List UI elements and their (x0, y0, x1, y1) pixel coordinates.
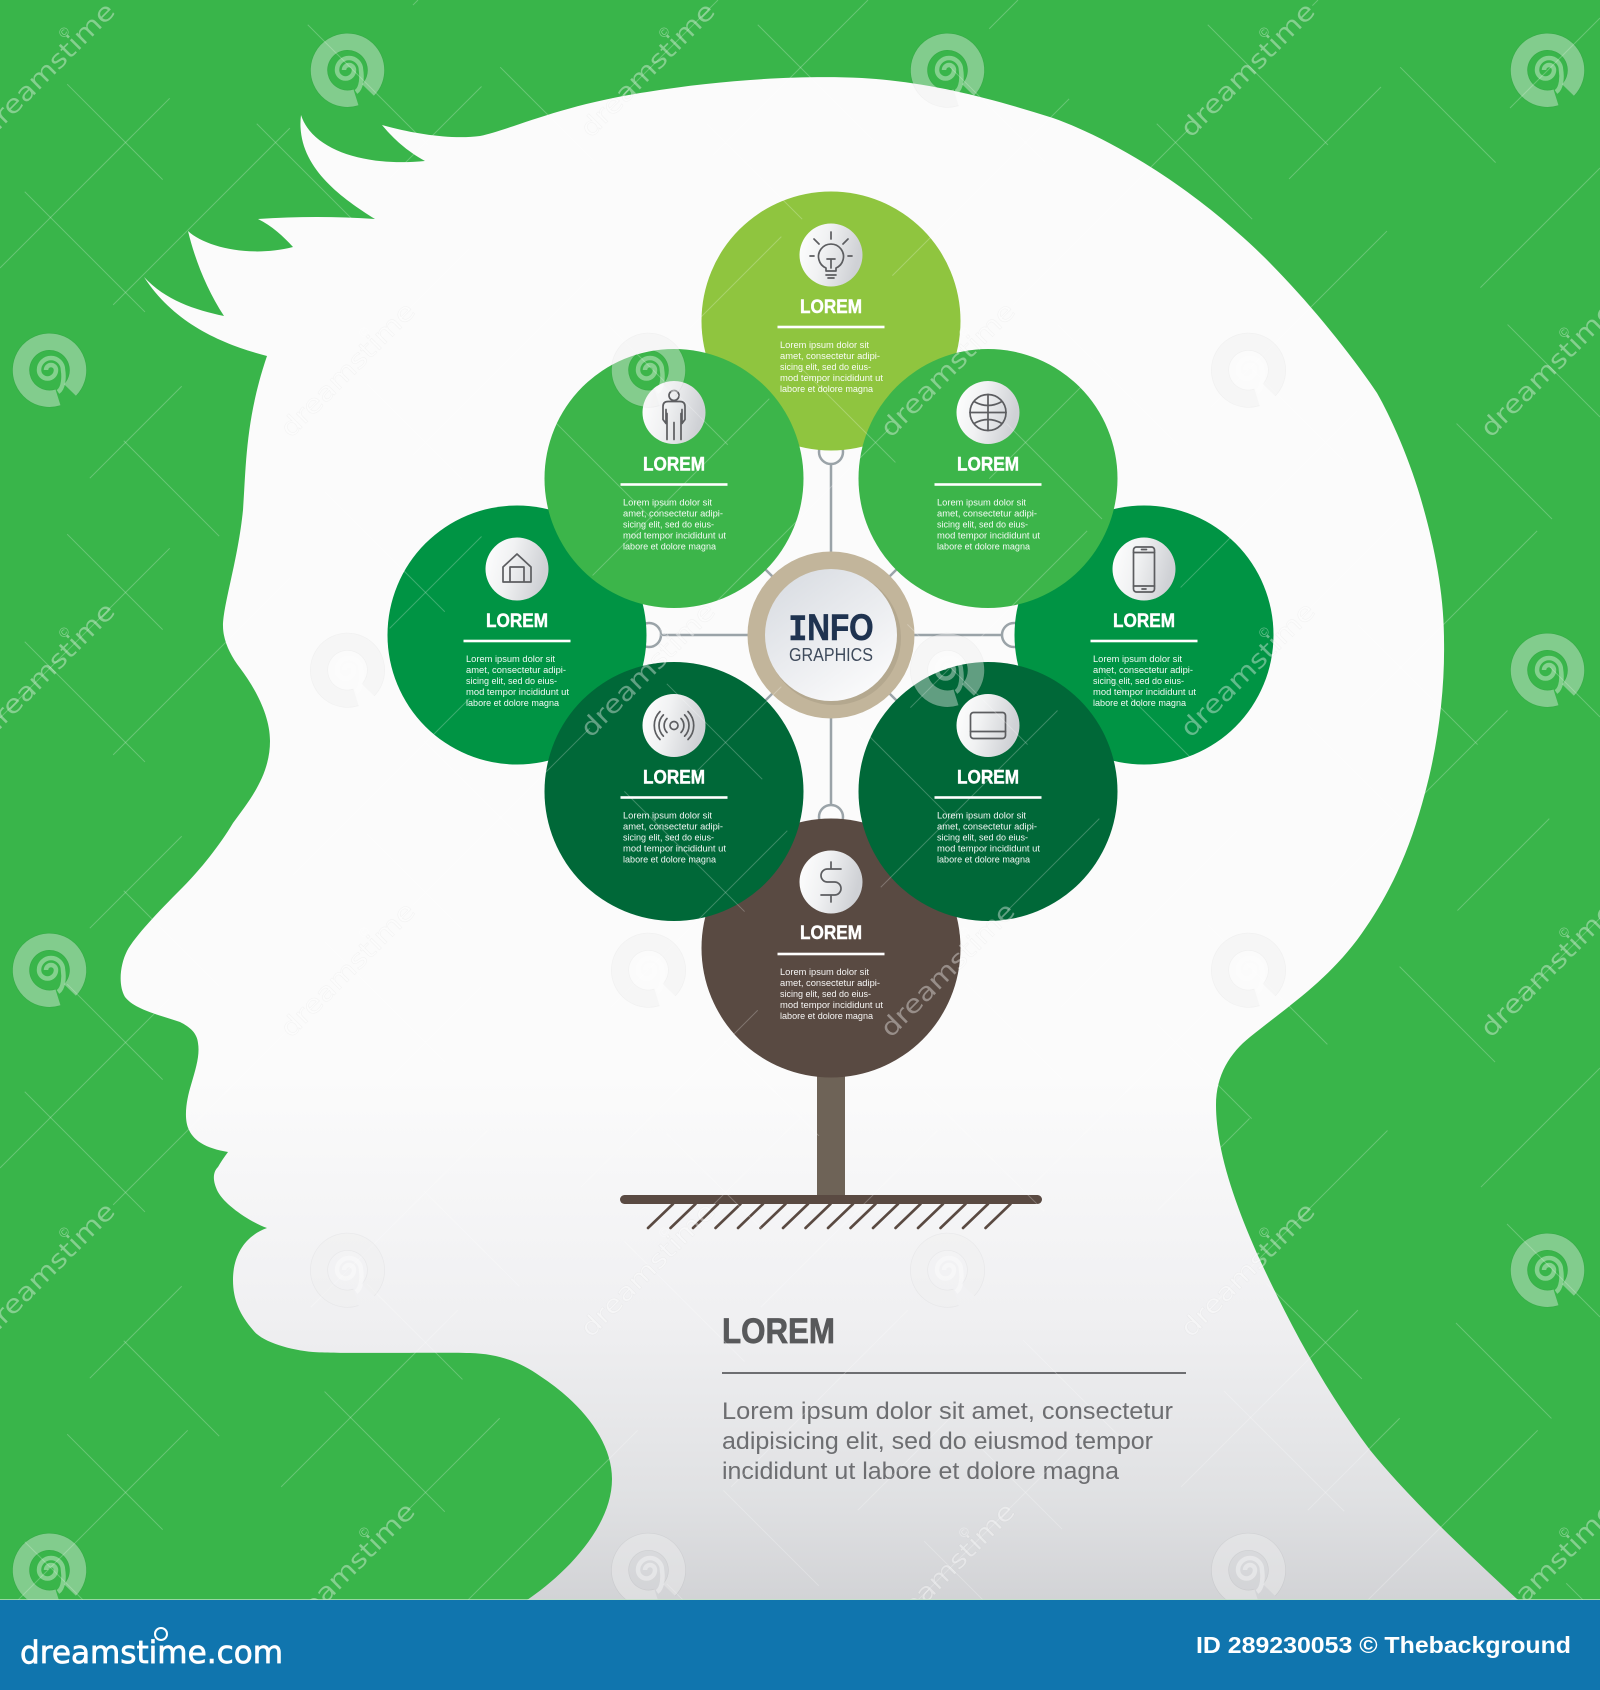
bottom paragraph (722, 1398, 1173, 1485)
heading: LOREM (957, 454, 1019, 476)
bottom heading: LOREM (722, 1312, 835, 1351)
body text: amet, consectetur adipi- (623, 508, 723, 520)
watermark: diagonal wordmarks: © (955, 323, 973, 341)
body text (937, 498, 1040, 552)
icon: dollar (821, 862, 841, 902)
body text: sicing elit, sed do eius- (780, 989, 871, 1000)
body text: amet, consectetur adipi- (623, 822, 723, 832)
body text: sicing elit, sed do eius- (937, 832, 1028, 844)
body text (623, 810, 726, 866)
watermark: diagonal wordmarks: © (55, 623, 73, 641)
tree trunk (817, 1070, 845, 1197)
bottom paragraph: adipisicing elit, sed do eiusmod tempor (722, 1428, 1153, 1455)
watermark: diagonal wordmarks: © (1555, 323, 1573, 341)
body text: mod tempor incididunt ut (937, 844, 1040, 854)
footer band (0, 1599, 1600, 1690)
icon: tablet (970, 712, 1006, 738)
watermark: diagonal wordmarks: © (355, 323, 373, 341)
body text: Lorem ipsum dolor sit (466, 654, 555, 665)
body text: amet, consectetur adipi- (780, 351, 880, 362)
icon: house (503, 554, 531, 582)
watermark: diagonal wordmarks: dreamstime (874, 1496, 1021, 1643)
heading: LOREM (957, 766, 1019, 788)
head silhouette (121, 77, 1518, 1600)
body text (937, 810, 1040, 866)
body text: sicing elit, sed do eius- (937, 520, 1028, 530)
body text: Lorem ipsum dolor sit (780, 967, 869, 978)
watermark: diagonal wordmarks: © (1555, 923, 1573, 941)
body text: labore et dolore magna (1093, 698, 1187, 709)
watermark: diagonal wordmarks: © (355, 1523, 373, 1541)
body text: mod tempor incididunt ut (623, 530, 726, 542)
panel: top circle, light bulb (702, 192, 960, 450)
body text: sicing elit, sed do eius- (780, 362, 871, 373)
watermark: diagonal wordmarks: dreamstime (1174, 1196, 1321, 1343)
watermark: diagonal wordmarks: dreamstime (874, 296, 1021, 443)
body text: amet, consectetur adipi- (780, 978, 880, 989)
watermark: diagonal wordmarks: © (655, 623, 673, 641)
body text: sicing elit, sed do eius- (623, 520, 714, 530)
bottom paragraph: incididunt ut labore et dolore magna (722, 1458, 1120, 1485)
icon: light bulb (810, 232, 852, 278)
panel: upper-right circle, basketball (858, 349, 1118, 608)
connectors from hub to circles (637, 440, 1026, 829)
icon: basketball (970, 394, 1006, 430)
watermark: diagonal wordmarks: dreamstime (1474, 296, 1600, 443)
footer credit: ID 289230053 © Thebackground (1196, 1632, 1571, 1658)
watermark: diagonal wordmarks: dreamstime (574, 0, 721, 143)
watermark: diagonal wordmarks: © (955, 923, 973, 941)
watermark: diagonal wordmarks: dreamstime (874, 896, 1021, 1043)
watermark: diagonal wordmarks: © (655, 23, 673, 41)
heading: LOREM (1113, 610, 1175, 632)
body text: labore et dolore magna (937, 854, 1031, 866)
watermark: diagonal wordmarks: © (1255, 23, 1273, 41)
body text: amet, consectetur adipi- (937, 822, 1037, 832)
body text: Lorem ipsum dolor sit (937, 810, 1026, 822)
hub title INFO: INFO (788, 608, 874, 652)
body text: labore et dolore magna (780, 384, 874, 395)
body text: amet, consectetur adipi- (1093, 665, 1193, 676)
watermark: diagonal wordmarks: © (55, 23, 73, 41)
body text: Lorem ipsum dolor sit (623, 498, 712, 508)
body text: sicing elit, sed do eius- (623, 832, 714, 844)
icon: phone (1134, 547, 1154, 592)
panel: left circle, house (388, 506, 646, 764)
ground line with hatching (620, 1195, 1042, 1228)
hub subtitle GRAPHICS: GRAPHICS (789, 644, 873, 665)
bottom paragraph: Lorem ipsum dolor sit amet, consectetur (722, 1398, 1173, 1425)
panel: lower-right circle, tablet (858, 662, 1118, 921)
heading: LOREM (486, 610, 548, 632)
body text (466, 654, 569, 709)
body text: mod tempor incididunt ut (780, 1000, 883, 1011)
body text: mod tempor incididunt ut (1093, 687, 1196, 698)
watermark: diagonal wordmarks: dreamstime (574, 596, 721, 743)
body text: sicing elit, sed do eius- (466, 676, 557, 687)
icon: person (663, 390, 685, 440)
body text (1093, 654, 1196, 709)
watermark: diagonal wordmarks: © (655, 1223, 673, 1241)
body text: mod tempor incididunt ut (937, 530, 1040, 542)
body text: Lorem ipsum dolor sit (623, 810, 712, 822)
body text: labore et dolore magna (623, 854, 717, 866)
body text: labore et dolore magna (466, 698, 560, 709)
panel: bottom circle, dollar (702, 818, 960, 1078)
watermark: diagonal wordmarks: © (1555, 1523, 1573, 1541)
heading: LOREM (643, 454, 705, 476)
watermark: diagonal wordmarks: dreamstime (1174, 596, 1321, 743)
body text: amet, consectetur adipi- (937, 508, 1037, 520)
heading: LOREM (800, 922, 862, 944)
hub: infographics centre (748, 552, 914, 718)
watermark: diagonal wordmarks: dreamstime (574, 1196, 721, 1343)
watermark: diagonal wordmarks: dreamstime (1174, 0, 1321, 143)
body text: labore et dolore magna (937, 542, 1031, 552)
icon: wireless signal (654, 712, 694, 740)
watermark: diagonal wordmarks: dreamstime (1474, 1496, 1600, 1643)
body text: labore et dolore magna (623, 542, 717, 552)
heading: LOREM (643, 766, 705, 788)
body text: sicing elit, sed do eius- (1093, 676, 1184, 687)
bottom text block (722, 1312, 1186, 1485)
watermark: diagonal wordmarks: © (355, 923, 373, 941)
watermark: diagonal wordmarks: © (955, 1523, 973, 1541)
watermark: diagonal wordmarks: © (1255, 623, 1273, 641)
body text: amet, consectetur adipi- (466, 665, 566, 676)
body text (623, 498, 726, 552)
footer logo: dreamstime.com (20, 1635, 283, 1671)
watermark: diagonal wordmarks: dreamstime (274, 1496, 421, 1643)
body text: Lorem ipsum dolor sit (937, 498, 1026, 508)
body text: mod tempor incididunt ut (623, 844, 726, 854)
body text: mod tempor incididunt ut (466, 687, 569, 698)
heading: LOREM (800, 296, 862, 318)
body text: labore et dolore magna (780, 1011, 874, 1022)
body text: Lorem ipsum dolor sit (1093, 654, 1182, 665)
watermark: diagonal wordmarks: dreamstime (274, 296, 421, 443)
body text: mod tempor incididunt ut (780, 373, 883, 384)
panel: upper-left circle, person (544, 349, 804, 608)
watermark: diagonal wordmarks: dreamstime (274, 896, 421, 1043)
watermark: diagonal wordmarks: © (1255, 1223, 1273, 1241)
panel: lower-left circle, signal (544, 662, 804, 921)
watermark: diagonal wordmarks: dreamstime (1474, 896, 1600, 1043)
watermark: diagonal wordmarks: © (55, 1223, 73, 1241)
panel: right circle, phone (1014, 506, 1274, 764)
body text (780, 340, 883, 395)
footer logo spiral (155, 1628, 167, 1640)
body text (780, 967, 883, 1022)
body text: Lorem ipsum dolor sit (780, 340, 869, 351)
